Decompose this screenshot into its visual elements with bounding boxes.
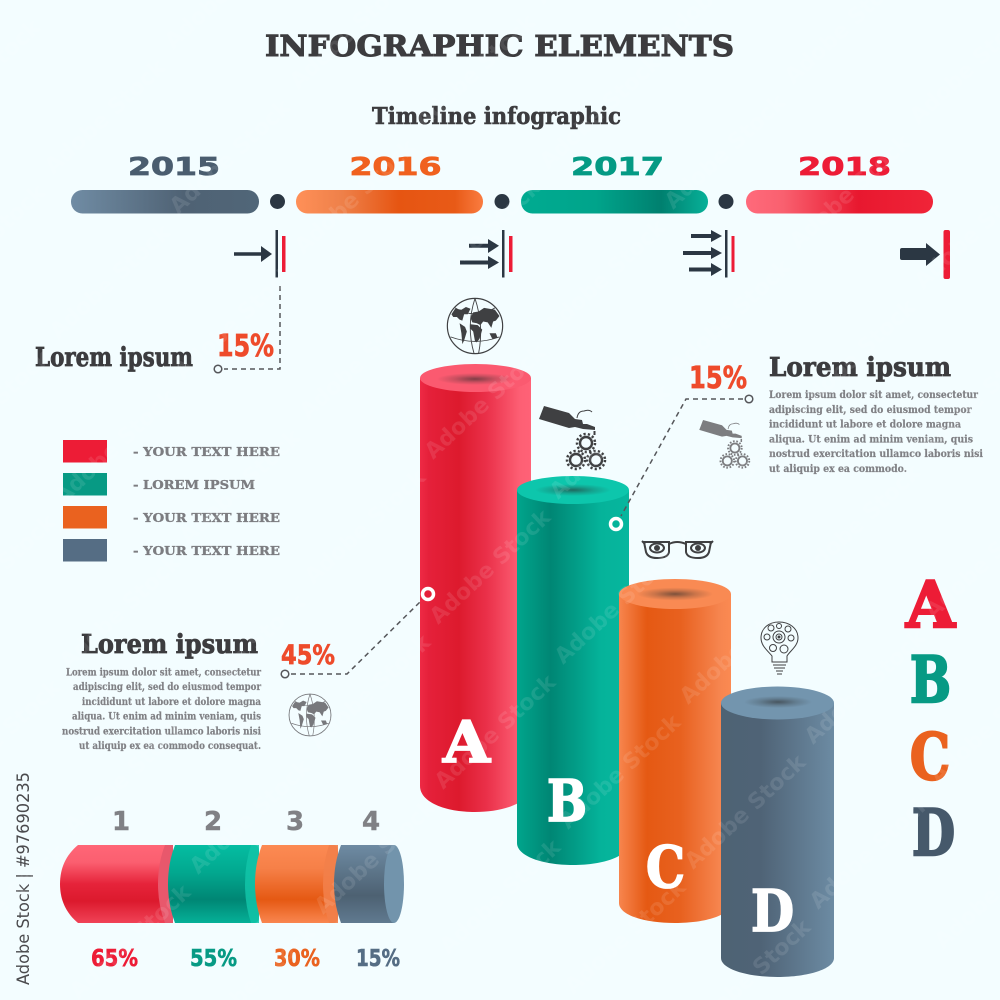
timeline dots	[270, 194, 734, 209]
letter D: D	[751, 878, 794, 945]
watermark: Adobe Stock	[535, 49, 667, 174]
watermark: Adobe Stock	[435, 834, 567, 959]
tube labels	[112, 807, 380, 837]
legend red	[63, 440, 107, 462]
tube labels: 3	[286, 807, 304, 837]
body text: ut aliquip ex ea commodo.	[769, 463, 907, 475]
legend labels: - YOUR TEXT HERE	[133, 444, 280, 459]
body text: aliqua. Ut enim ad minim veniam, quis	[72, 710, 261, 722]
watermark: Adobe Stock	[290, 134, 422, 259]
year 2015: 2015	[128, 152, 220, 181]
watermark: Adobe Stock	[680, 749, 812, 874]
percent: 45%	[281, 640, 335, 671]
bar 2016	[296, 190, 483, 214]
tube percentages: 55%	[190, 946, 237, 972]
arrow marker: three arrows	[683, 230, 734, 278]
legend labels: - LOREM IPSUM	[133, 477, 255, 492]
legend labels	[133, 444, 280, 558]
watermark: Adobe Stock	[675, 584, 807, 709]
body text	[62, 666, 261, 752]
key letter D: D	[912, 796, 955, 871]
cylinder D	[721, 686, 834, 977]
percent: 15%	[689, 361, 747, 396]
body text: aliqua. Ut enim ad minim veniam, quis	[769, 434, 973, 446]
watermark: Adobe Stock	[790, 294, 922, 419]
icon: glasses	[642, 541, 713, 558]
legend teal	[63, 473, 107, 496]
watermark: Adobe Stock	[50, 384, 182, 509]
tube percentages	[91, 946, 400, 972]
watermark: Adobe Stock	[550, 544, 682, 669]
watermark: Adobe Stock	[305, 629, 437, 754]
legend	[63, 440, 280, 562]
watermark: Adobe Stock	[410, 9, 542, 134]
watermark: Adobe Stock	[310, 794, 442, 919]
arrow marker: two arrows	[460, 230, 512, 278]
legend labels: - YOUR TEXT HERE	[133, 510, 280, 525]
watermark: Adobe Stock	[175, 424, 307, 549]
cylinder C	[619, 579, 731, 923]
legend orange	[63, 506, 107, 528]
segment 2	[168, 845, 259, 923]
watermark: Adobe Stock	[795, 459, 927, 584]
watermark: Adobe Stock	[45, 219, 177, 344]
title: INFOGRAPHIC ELEMENTS	[265, 29, 734, 63]
watermark: Adobe Stock	[560, 874, 692, 999]
body text: adipiscing elit, sed do eiusmod tempor	[769, 404, 972, 416]
dashed leader	[224, 286, 280, 369]
watermark: Adobe Stock	[60, 714, 192, 839]
segment 4	[334, 845, 394, 923]
heading: Lorem ipsum	[81, 630, 258, 660]
watermark: Adobe Stock	[300, 464, 432, 589]
bar 2018	[746, 190, 933, 214]
watermark: Adobe Stock	[165, 94, 297, 219]
key letter C: C	[910, 720, 950, 795]
tube percentages: 65%	[91, 946, 138, 972]
watermark: Adobe Stock	[415, 174, 547, 299]
watermark: Adobe Stock	[425, 504, 557, 629]
leader: B to right callout	[610, 395, 753, 530]
legend labels: - YOUR TEXT HERE	[133, 543, 280, 558]
tube labels: 1	[112, 807, 130, 837]
tube percentages: 30%	[274, 946, 320, 972]
segment 1	[60, 845, 173, 923]
callout: left	[62, 630, 335, 752]
legend slate	[63, 539, 107, 562]
letter A: A	[442, 709, 491, 776]
watermark: Adobe Stock	[670, 419, 802, 544]
arrow marker: one arrow	[234, 230, 286, 278]
body text: ut aliquip ex ea commodo consequat.	[79, 740, 261, 752]
icon: light bulb	[761, 622, 798, 674]
year 2018: 2018	[798, 152, 891, 181]
letter B: B	[547, 768, 587, 835]
watermark: Adobe Stock	[785, 129, 917, 254]
tube labels: 4	[362, 807, 380, 837]
year 2017: 2017	[571, 152, 664, 181]
body text: incididunt ut labore et dolore magna	[82, 696, 261, 708]
watermark: Adobe Stock	[430, 669, 562, 794]
percent: 15%	[217, 329, 274, 364]
body text: Lorem ipsum dolor sit amet, consectetur	[66, 666, 261, 678]
heading: Lorem ipsum	[769, 353, 951, 383]
body text: incididunt ut labore et dolore magna	[769, 418, 961, 430]
watermark: Adobe Stock	[800, 624, 932, 749]
icon: large globe	[447, 298, 503, 354]
watermark: Adobe Stock	[420, 339, 552, 464]
year 2016: 2016	[350, 152, 442, 181]
watermark: Adobe Stock	[540, 214, 672, 339]
bar 2015	[71, 190, 259, 214]
letter C: C	[646, 834, 685, 901]
watermark: Adobe Stock	[185, 754, 317, 879]
arrow marker: bold arrow	[900, 230, 950, 279]
horizontal tube chart	[60, 807, 404, 972]
tube percentages: 15%	[356, 946, 400, 972]
watermark: Adobe Stock	[55, 549, 187, 674]
watermark: Adobe Stock	[555, 709, 687, 834]
body text: nostrud exercitation ullamco laboris nisi	[62, 726, 261, 738]
icon: small bottle and gears	[699, 420, 749, 468]
watermark: Adobe Stock	[180, 589, 312, 714]
leader: A to left callout	[281, 588, 434, 678]
callout: top left	[35, 286, 280, 373]
segment 3	[255, 845, 338, 923]
cylinder B	[517, 476, 629, 865]
subtitle: timeline infographic: Timeline infographic	[372, 103, 621, 130]
watermark: Adobe Stock	[660, 89, 792, 214]
watermark: Adobe Stock	[295, 299, 427, 424]
callout: right	[689, 353, 983, 475]
tube labels: 2	[204, 807, 222, 837]
bar 2017	[521, 190, 708, 214]
key letter B: B	[910, 643, 951, 718]
watermark: Adobe Stock	[545, 379, 677, 504]
icon: bottle and gears	[539, 406, 605, 469]
watermark: Adobe Stock	[170, 259, 302, 384]
watermark: Adobe Stock	[665, 254, 797, 379]
cylinder A	[420, 364, 531, 812]
timeline	[71, 152, 933, 214]
key letter A: A	[905, 568, 956, 643]
watermark: Adobe Stock	[40, 54, 172, 179]
icon: small globe	[289, 694, 331, 736]
body text: adipiscing elit, sed do eiusmod tempor	[73, 681, 261, 693]
watermark: Adobe Stock	[805, 789, 937, 914]
stock credit: Adobe Stock | #97690235	[14, 772, 34, 985]
heading: Lorem ipsum	[35, 343, 193, 373]
body text	[769, 389, 983, 475]
